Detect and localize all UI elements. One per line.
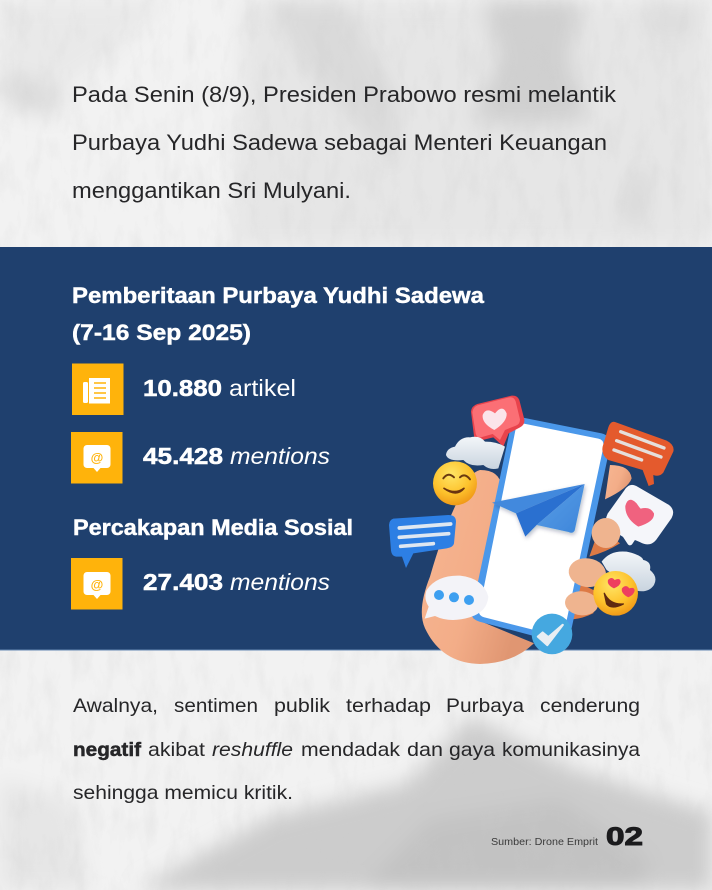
icon: heart [625,500,654,527]
icon: blue chat bubble [389,515,456,568]
icon: mention bubble [71,432,122,484]
illustration: hand holding phone with social icons [389,396,674,664]
closing paragraph: terhadap [346,695,431,717]
phone [471,417,610,642]
stat: 10.880 artikel [143,375,296,401]
stat: 27.403 mentions [143,569,331,595]
stat: 27.403 mentions: mentions [230,569,331,595]
closing paragraph: cenderung [540,695,640,717]
heading: Percakapan Media Sosial: Percakapan Media Sosial [73,515,353,540]
intro text block: Purbaya Yudhi Sadewa sebagai Menteri Keuangan [72,130,607,155]
closing paragraph [73,695,640,804]
intro text block: menggantikan Sri Mulyani. [72,178,351,203]
emoji: heart eyes [593,571,638,616]
cloud right [602,551,655,591]
closing paragraph: akibat [148,739,206,761]
icon: orange chat bubble [602,422,674,486]
heading: Pemberitaan: Pemberitaan Purbaya Yudhi Sadewa [72,283,485,308]
icon: mention bubble [71,558,122,610]
hand palm and thumb [422,470,534,664]
emoji: smiling [433,461,477,505]
closing paragraph: mendadak [301,739,400,761]
stat: 45.428 mentions: mentions [230,443,331,469]
stat: 27.403 mentions: 27.403 [143,569,223,595]
icon: white heart bubble [609,488,670,543]
icon: red heart bubble [471,396,524,447]
intro text block [72,82,617,203]
closing paragraph: gaya [449,739,495,761]
stat: 10.880 artikel: 10.880 [143,375,222,401]
paper plane [492,484,585,537]
cloud left [446,437,505,469]
closing paragraph: publik [274,695,330,717]
closing paragraph: sentimen [174,695,258,717]
closing paragraph: reshuffle [212,739,293,761]
closing paragraph: dan [407,739,443,761]
icon: mention bubble: @ [91,577,103,592]
icon: check badge [532,614,572,654]
back fingers [573,465,632,619]
source note: Sumber: Drone Emprit [491,836,598,848]
fingers front [564,518,620,617]
icon: newspaper [72,364,124,415]
closing paragraph: Awalnya, [73,695,158,717]
page number: 02 [606,823,643,851]
closing paragraph: komunikasinya [502,739,640,761]
icon: dots bubble [425,576,488,620]
stat: 10.880 artikel: artikel [229,375,296,401]
stat: 45.428 mentions [143,443,331,469]
stat: 45.428 mentions: 45.428 [143,443,223,469]
closing paragraph: Purbaya [446,695,524,717]
closing paragraph: negatif [73,739,142,761]
heading: Pemberitaan [72,283,485,345]
intro text block: Pada Senin (8/9), Presiden Prabowo resmi melantik [72,82,617,107]
heading: Pemberitaan: (7-16 Sep 2025) [72,320,251,345]
panel: navy statistics band [0,247,712,650]
closing paragraph: sehingga memicu kritik. [73,782,293,804]
icon: mention bubble: @ [91,450,103,465]
